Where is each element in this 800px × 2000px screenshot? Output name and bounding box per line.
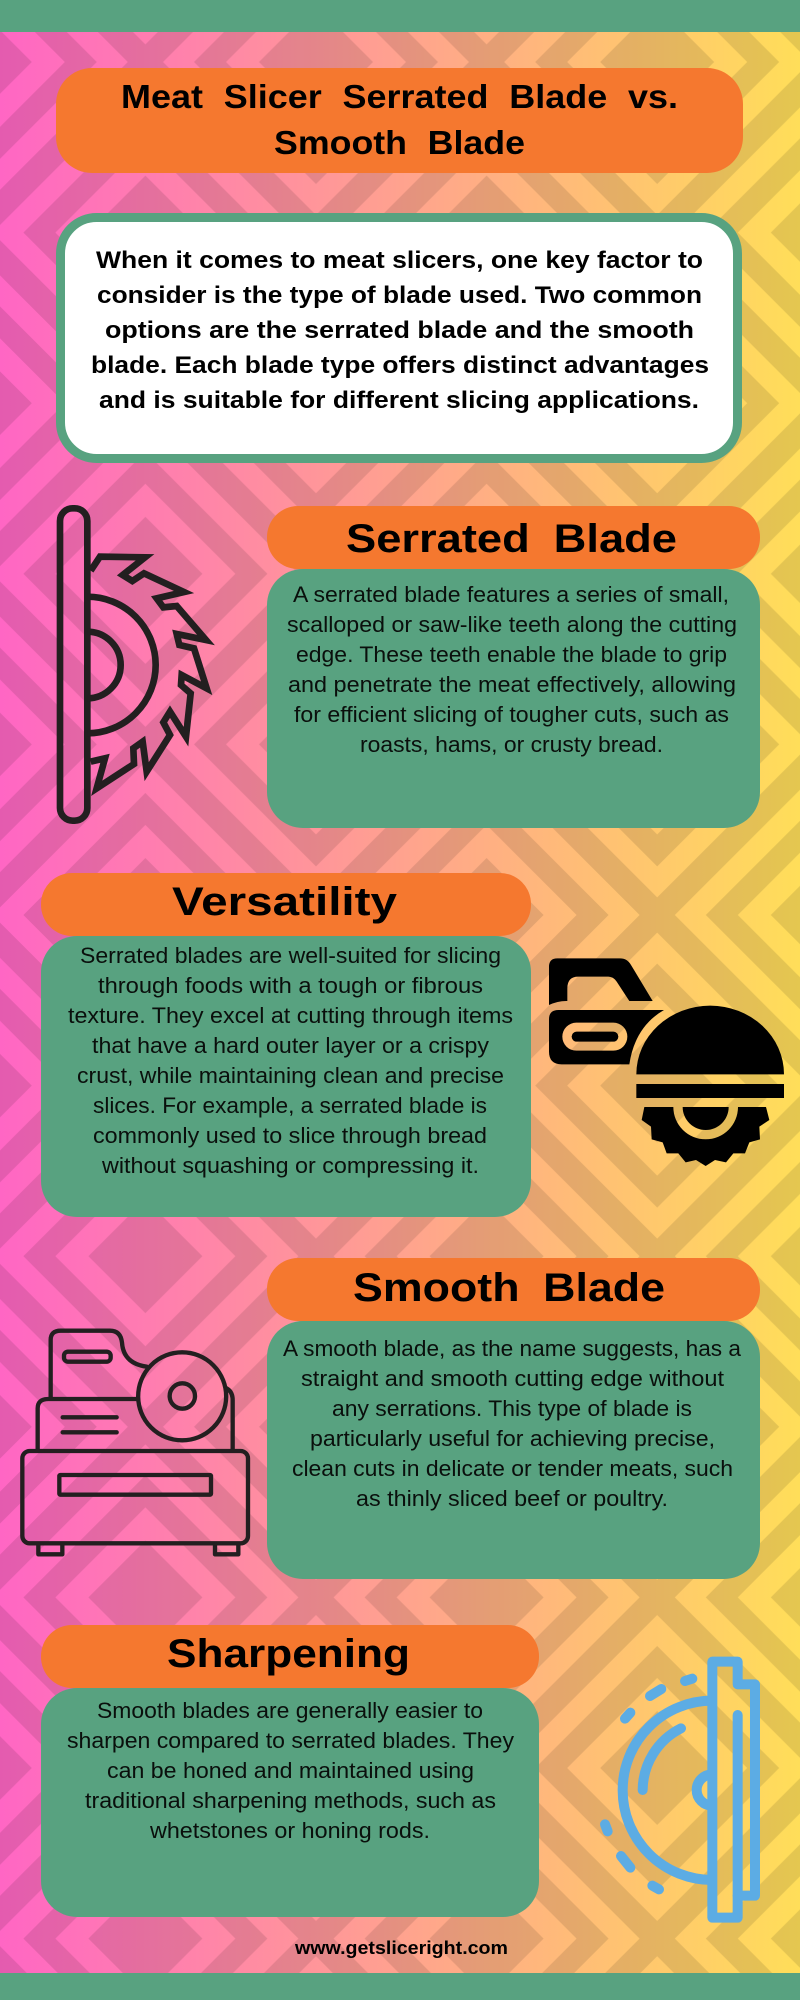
panel: sharpening: sharpen compared to serrated blades. They bbox=[67, 1728, 514, 1753]
panel: versatility: commonly used to slice through bread bbox=[93, 1123, 487, 1148]
panel: serrated blade: edge. These teeth enable the blade to grip bbox=[296, 642, 727, 667]
top band bbox=[0, 0, 800, 32]
panel: sharpening: Sharpening bbox=[167, 1632, 410, 1676]
panel: smooth blade bbox=[267, 1258, 760, 1579]
panel: sharpening: traditional sharpening methods, such as bbox=[85, 1788, 496, 1813]
panel: introduction: When it comes to meat slicers, one key factor to bbox=[96, 247, 703, 274]
panel: smooth blade: particularly useful for achieving precise, bbox=[310, 1426, 715, 1451]
panel: smooth blade: any serrations. This type of blade is bbox=[332, 1396, 692, 1421]
panel: smooth blade: A smooth blade, as the name suggests, has a bbox=[283, 1336, 742, 1361]
icon: serrated saw blade bbox=[60, 508, 207, 821]
panel: smooth blade: clean cuts in delicate or tender meats, such bbox=[292, 1456, 733, 1481]
title bbox=[56, 68, 743, 173]
panel: introduction: options are the serrated blade and the smooth bbox=[105, 317, 694, 344]
panel: smooth blade: straight and smooth cutting edge without bbox=[301, 1366, 724, 1391]
panel: introduction: and is suitable for different slicing applications. bbox=[99, 387, 699, 414]
panel: serrated blade bbox=[267, 506, 760, 828]
panel: sharpening: can be honed and maintained using bbox=[107, 1758, 474, 1783]
panel: sharpening: Smooth blades are generally easier to bbox=[97, 1698, 483, 1723]
panel: versatility: through foods with a tough or fibrous bbox=[98, 973, 483, 998]
bottom band bbox=[0, 1973, 800, 2000]
panel: serrated blade: roasts, hams, or crusty bread. bbox=[360, 732, 663, 757]
panel: sharpening bbox=[41, 1625, 539, 1917]
panel: serrated blade: and penetrate the meat effectively, allowing bbox=[288, 672, 736, 697]
panel: versatility: without squashing or compressing it. bbox=[101, 1153, 479, 1178]
panel: versatility: Serrated blades are well-suited for slicing bbox=[80, 943, 501, 968]
panel: introduction bbox=[60, 218, 738, 458]
icon: circular saw bbox=[549, 958, 784, 1166]
panel: versatility bbox=[41, 873, 531, 1217]
panel: smooth blade: as thinly sliced beef or poultry. bbox=[356, 1486, 668, 1511]
panel: versatility: Versatility bbox=[172, 880, 398, 924]
panel: versatility: that have a hard outer layer or a crispy bbox=[92, 1033, 489, 1058]
panel: serrated blade: for efficient slicing of tougher cuts, such as bbox=[294, 702, 729, 727]
panel: versatility: texture. They excel at cutting through items bbox=[68, 1003, 513, 1028]
panel: serrated blade: scalloped or saw-like teeth along the cutting bbox=[287, 612, 737, 637]
panel: introduction: blade. Each blade type offers distinct advantages bbox=[91, 352, 709, 379]
title: Meat Slicer Serrated Blade vs. bbox=[121, 78, 678, 115]
icon: smooth blade bbox=[605, 1662, 755, 1918]
title: Smooth Blade bbox=[274, 124, 525, 161]
panel: versatility: crust, while maintaining clean and precise bbox=[77, 1063, 504, 1088]
icon: meat slicer machine bbox=[22, 1331, 248, 1554]
panel: introduction: consider is the type of blade used. Two common bbox=[97, 282, 702, 309]
panel: serrated blade: Serrated Blade bbox=[346, 517, 677, 561]
panel: versatility: slices. For example, a serrated blade is bbox=[93, 1093, 487, 1118]
panel: sharpening: whetstones or honing rods. bbox=[149, 1818, 430, 1843]
footer website: www.getsliceright.com bbox=[294, 1938, 508, 1958]
panel: smooth blade: Smooth Blade bbox=[353, 1266, 665, 1310]
panel: serrated blade: A serrated blade features a series of small, bbox=[293, 582, 729, 607]
